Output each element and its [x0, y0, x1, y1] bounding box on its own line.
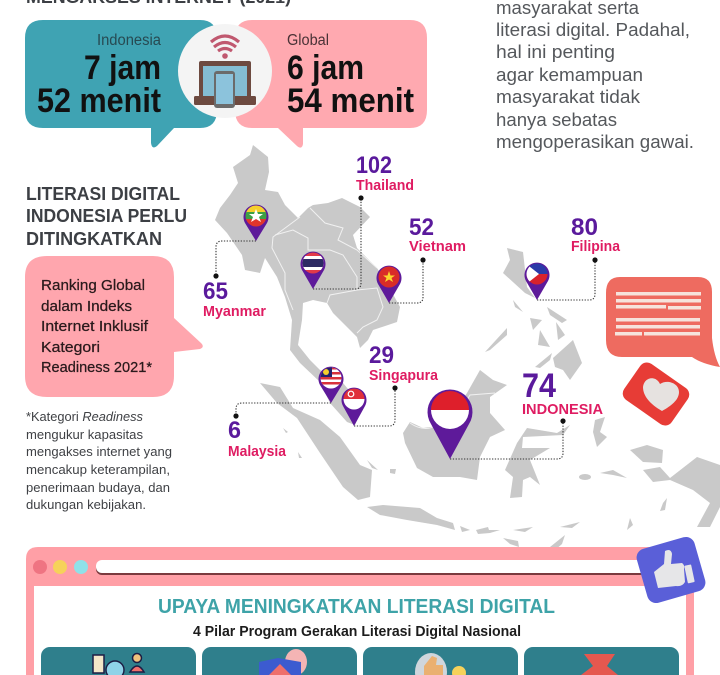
- panel: browser window: [26, 547, 694, 675]
- label: Vietnam rank 52: 52: [409, 214, 434, 241]
- heading: literasi digital: INDONESIA PERLU: [26, 206, 187, 226]
- text block: footnote: penerimaan budaya, dan: [26, 481, 170, 495]
- map: Southeast Asia: [215, 145, 720, 554]
- text block: footnote: dukungan kebijakan.: [26, 498, 146, 512]
- label: Myanmar rank 65: 65: [203, 278, 228, 305]
- icon: heart tile: [620, 359, 692, 429]
- callout: ranking global: Internet Inklusif: [41, 319, 149, 335]
- callout: global internet time: [235, 20, 427, 148]
- browser dots: [33, 560, 88, 574]
- text block: intro paragraph: mengoperasikan gawai.: [496, 131, 694, 152]
- connector: Vietnam: [389, 257, 426, 303]
- text block: intro paragraph: hal ini penting: [496, 41, 615, 62]
- pin: Indonesia flag: [427, 389, 472, 459]
- callout: Indonesia internet time: 52 menit: [37, 82, 161, 120]
- heading: literasi digital: DITINGKATKAN: [26, 229, 162, 249]
- text block: intro paragraph: masyarakat tidak: [496, 86, 641, 107]
- callout: Indonesia internet time: [25, 20, 217, 147]
- pin: Myanmar flag: [243, 205, 269, 241]
- connector: Indonesia: [450, 418, 566, 459]
- callout: ranking global: [25, 256, 203, 397]
- text block: intro paragraph: agar kemampuan: [496, 64, 643, 85]
- label: Myanmar rank 65: Myanmar: [203, 304, 266, 320]
- connector: Singapura: [354, 385, 398, 426]
- label: Thailand rank 102: Thailand: [356, 178, 414, 194]
- label: Vietnam rank 52: [409, 214, 466, 255]
- callout: Indonesia internet time: Indonesia: [97, 32, 161, 49]
- pin: Vietnam flag: [376, 266, 402, 303]
- callout: ranking global: dalam Indeks: [41, 299, 132, 315]
- label: Malaysia rank 6: 6: [228, 417, 241, 444]
- heading: literasi digital: LITERASI DIGITAL: [26, 184, 180, 204]
- text block: footnote: mencakup keterampilan,: [26, 463, 170, 477]
- label: Singapura rank 29: 29: [369, 342, 394, 369]
- callout: ranking global: Kategori: [41, 340, 100, 356]
- label: Indonesia rank 74: [522, 367, 603, 418]
- heading: literasi digital: [26, 184, 187, 249]
- label: Indonesia rank 74: 74: [522, 367, 556, 405]
- label: Vietnam rank 52: Vietnam: [409, 239, 466, 255]
- text block: footnote: [26, 410, 172, 512]
- panel subtitle: 4 Pilar Program Gerakan Literasi Digital Nasional: [193, 624, 521, 640]
- label: Malaysia rank 6: [228, 417, 287, 460]
- callout: Indonesia internet time: 7 jam: [84, 49, 161, 87]
- label: Malaysia rank 6: Malaysia: [228, 444, 287, 460]
- address bar: [96, 560, 646, 575]
- label: Indonesia rank 74: INDONESIA: [522, 401, 603, 418]
- label: Myanmar rank 65: [203, 278, 266, 320]
- icon: wifi and devices: [178, 24, 272, 118]
- connector: Malaysia: [233, 403, 331, 419]
- pin: Filipina flag: [524, 262, 550, 300]
- label: Filipina rank 80: [571, 214, 621, 255]
- label: Filipina rank 80: Filipina: [571, 239, 621, 255]
- callout: global internet time: 54 menit: [287, 82, 414, 120]
- text block: footnote: mengakses internet yang: [26, 445, 172, 459]
- text block: footnote: mengukur kapasitas: [26, 428, 143, 442]
- label: Thailand rank 102: 102: [356, 152, 392, 179]
- panel title: UPAYA MENINGKATKAN LITERASI DIGITAL: [158, 596, 555, 618]
- text block: intro paragraph: [496, 0, 694, 152]
- pin: Malaysia flag: [318, 366, 344, 403]
- icon: thumbs up tile: [634, 535, 708, 605]
- icon: chat bubble: [606, 277, 720, 367]
- label: Thailand rank 102: [356, 152, 414, 194]
- label: Singapura rank 29: [369, 342, 439, 384]
- card 4: digital culture: [524, 647, 679, 675]
- callout: ranking global: Ranking Global: [41, 278, 145, 294]
- text block: footnote: *Kategori Readiness: [26, 410, 143, 424]
- card 1: digital skills: [41, 647, 196, 675]
- connector: Myanmar: [213, 241, 256, 279]
- pin: Thailand flag: [300, 252, 326, 289]
- card 3: digital ethics: [363, 647, 518, 675]
- callout: ranking global: Readiness 2021*: [41, 360, 152, 376]
- label: Filipina rank 80: 80: [571, 214, 598, 241]
- pin: Singapura flag: [342, 388, 366, 426]
- callout: global internet time: Global: [287, 32, 329, 49]
- card 2: digital safety: [202, 647, 357, 675]
- label: Singapura rank 29: Singapura: [369, 368, 439, 384]
- text block: intro paragraph: hanya sebatas: [496, 109, 617, 130]
- connector: Filipina: [537, 257, 598, 300]
- connector: Thailand: [313, 195, 364, 289]
- callout: global internet time: 6 jam: [287, 49, 364, 87]
- text block: intro paragraph: literasi digital. Padahal,: [496, 19, 690, 40]
